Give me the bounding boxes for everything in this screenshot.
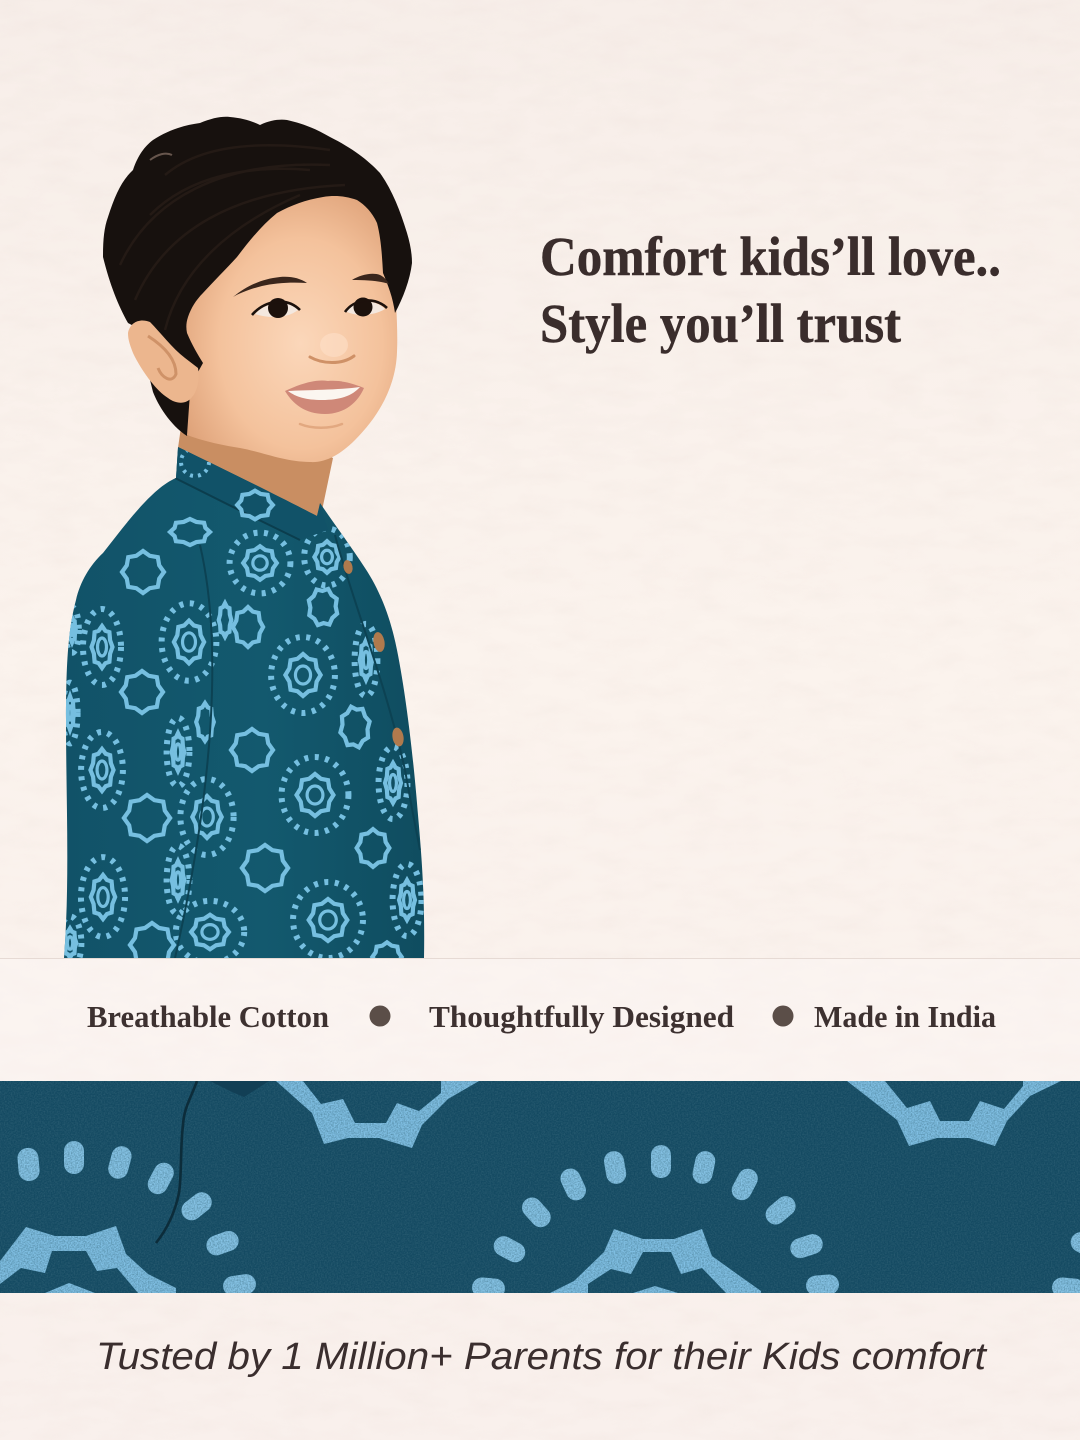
heading: Comfort kids’ll love.. bbox=[540, 226, 1001, 287]
face bbox=[178, 180, 397, 462]
eyes bbox=[255, 303, 298, 317]
tagline: Tusted by 1 Million+ Parents for their Kids comfort bbox=[96, 1336, 988, 1378]
buttons bbox=[342, 559, 405, 747]
kurta bbox=[59, 440, 430, 972]
large star motifs bbox=[0, 1081, 1061, 1293]
sleeve seam bbox=[175, 545, 212, 958]
feature: Made in India: Made in India bbox=[814, 999, 996, 1034]
nose bbox=[310, 356, 354, 362]
chin crease bbox=[300, 424, 342, 428]
drawstring bbox=[156, 1081, 197, 1243]
separator dot bbox=[772, 1006, 794, 1026]
hair bbox=[103, 117, 412, 372]
placket bbox=[335, 535, 420, 850]
heading: Style you’ll trust bbox=[540, 293, 902, 354]
illustration: smiling boy in teal kurta bbox=[59, 117, 430, 972]
star motifs bbox=[121, 519, 402, 972]
neck bbox=[178, 392, 333, 520]
heading bbox=[540, 226, 1001, 354]
features band bbox=[0, 958, 1080, 1081]
collar bbox=[175, 447, 328, 540]
fabric grain bbox=[0, 1081, 1080, 1293]
ear bbox=[128, 320, 199, 403]
separator dot bbox=[370, 1006, 390, 1026]
dotted arcs bbox=[17, 1141, 1080, 1299]
eyebrows bbox=[233, 277, 307, 297]
back hair below ear bbox=[150, 380, 198, 436]
feature: Breathable Cotton: Breathable Cotton bbox=[87, 999, 329, 1034]
fabric close-up banner bbox=[0, 1081, 1080, 1299]
dotted ring motifs bbox=[59, 528, 421, 970]
collar fragment bbox=[210, 1081, 269, 1097]
feature: Thoughtfully Designed: Thoughtfully Designed bbox=[429, 999, 734, 1034]
smile bbox=[285, 381, 364, 414]
